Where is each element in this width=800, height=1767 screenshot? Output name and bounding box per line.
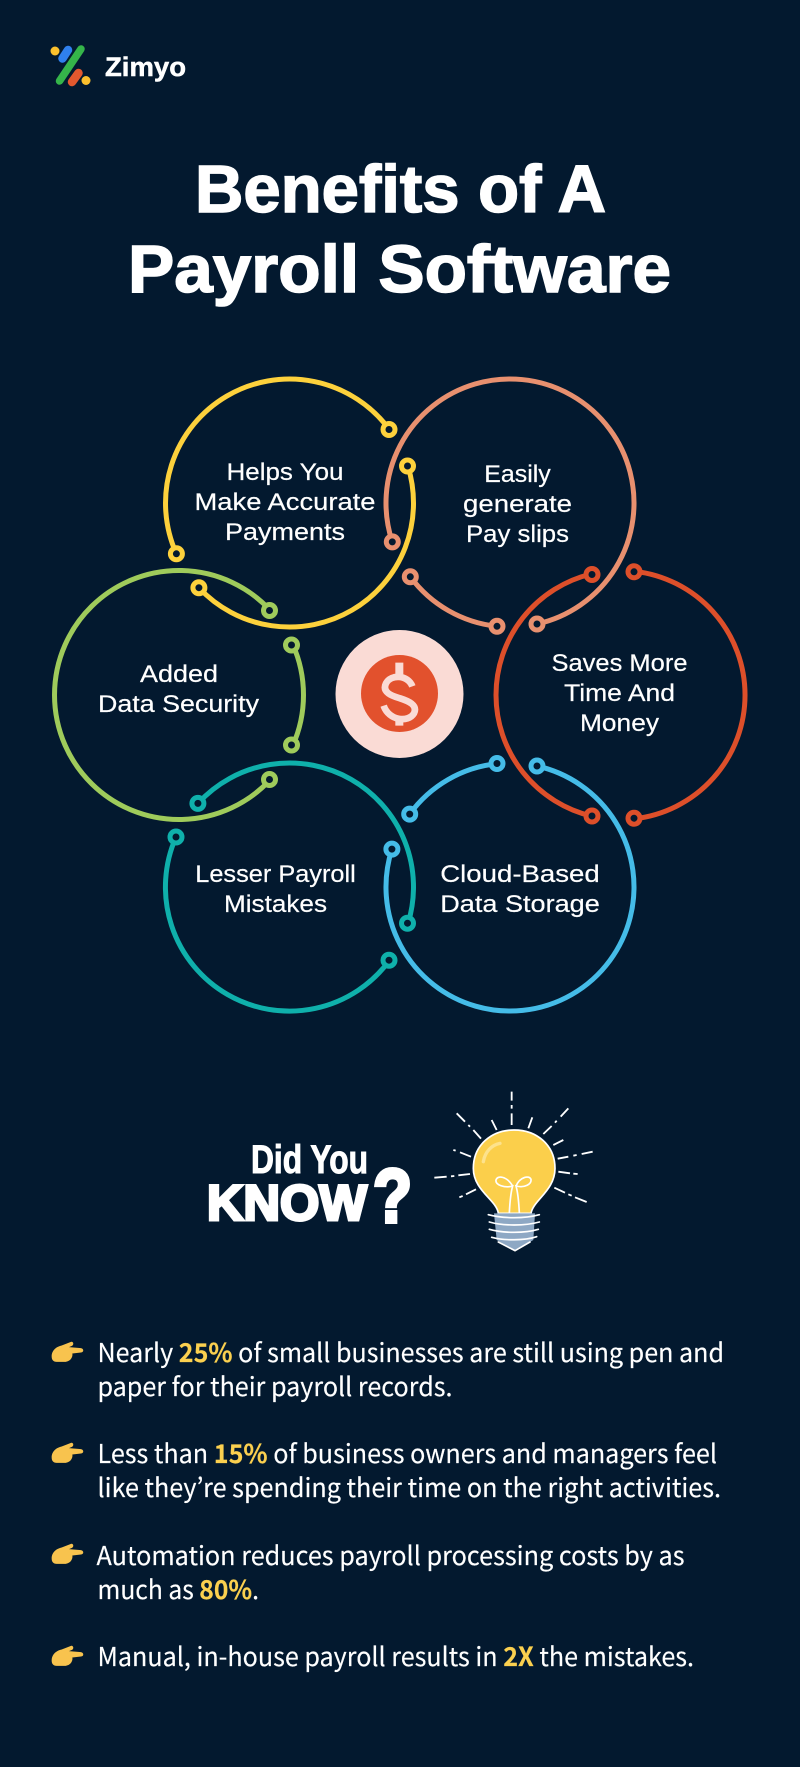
- fact 3: Automation reduces payroll processing costs by as: [96, 1536, 684, 1573]
- benefit text: pay slips: Pay slips: [466, 521, 569, 548]
- fact 2: [52, 1434, 721, 1505]
- title: [128, 152, 671, 307]
- benefit text: accurate payments: Payments: [225, 519, 345, 546]
- fact 1: [52, 1333, 724, 1404]
- benefit text: payroll mistakes: [195, 861, 356, 918]
- heading: Did You Know: KNOW: [207, 1175, 368, 1231]
- benefit ring: blue: [386, 758, 634, 1011]
- icon: pointing hand: [52, 1544, 83, 1564]
- icon: light bulb rays: [434, 1092, 593, 1202]
- benefit text: pay slips: Easily: [484, 461, 551, 488]
- benefit text: data security: [98, 661, 259, 718]
- logo: Zimyo: Zimyo: [105, 52, 186, 82]
- fact 2: like they’re spending their time on the right activities.: [98, 1468, 721, 1505]
- title: Benefits of A: [195, 152, 606, 227]
- fact 3: [52, 1536, 684, 1607]
- benefit ring: red: [496, 566, 745, 824]
- icon: dollar coin: [336, 630, 464, 758]
- benefit text: cloud storage: Data Storage: [440, 891, 600, 918]
- benefit text: cloud storage: [440, 861, 600, 918]
- logo: Zimyo: [50, 46, 186, 85]
- benefit text: saves time and money: Money: [580, 710, 659, 737]
- benefit text: saves time and money: [552, 650, 688, 737]
- benefit ring: teal: [165, 763, 414, 1011]
- benefit text: pay slips: [463, 461, 572, 548]
- benefit text: saves time and money: Saves More: [552, 650, 688, 677]
- fact 4: Manual, in-house payroll results in 2X the mistakes.: [98, 1637, 694, 1674]
- heading: Did You Know: [207, 1138, 412, 1239]
- fact 3: much as 80%.: [98, 1570, 259, 1607]
- fact 1: Nearly 25% of small businesses are still using pen and: [98, 1333, 724, 1370]
- benefit ring: yellow: [166, 379, 414, 627]
- benefit text: accurate payments: [194, 459, 376, 546]
- benefit ring: green: [55, 571, 303, 820]
- fact 2: Less than 15% of business owners and managers feel: [98, 1434, 717, 1471]
- benefit text: accurate payments: Helps You: [226, 459, 344, 486]
- benefit text: cloud storage: Cloud-Based: [440, 861, 600, 888]
- icon: pointing hand: [52, 1646, 83, 1666]
- icon: pointing hand: [52, 1443, 83, 1463]
- benefit text: accurate payments: Make Accurate: [194, 489, 376, 516]
- benefit text: payroll mistakes: Mistakes: [224, 891, 327, 918]
- benefit text: saves time and money: Time And: [564, 680, 675, 707]
- icon: pointing hand: [52, 1342, 83, 1362]
- benefit text: pay slips: generate: [463, 491, 572, 518]
- benefit text: payroll mistakes: Lesser Payroll: [195, 861, 356, 888]
- icon: light bulb: [473, 1130, 555, 1251]
- fact 1: paper for their payroll records.: [98, 1367, 452, 1404]
- benefit text: data security: Data Security: [98, 691, 259, 718]
- heading: Did You Know: ?: [373, 1154, 412, 1239]
- benefit text: data security: Added: [140, 661, 218, 688]
- benefit ring: peach: [386, 379, 634, 632]
- heading: Did You Know: Did You: [251, 1138, 368, 1182]
- title: Payroll Software: [128, 232, 671, 307]
